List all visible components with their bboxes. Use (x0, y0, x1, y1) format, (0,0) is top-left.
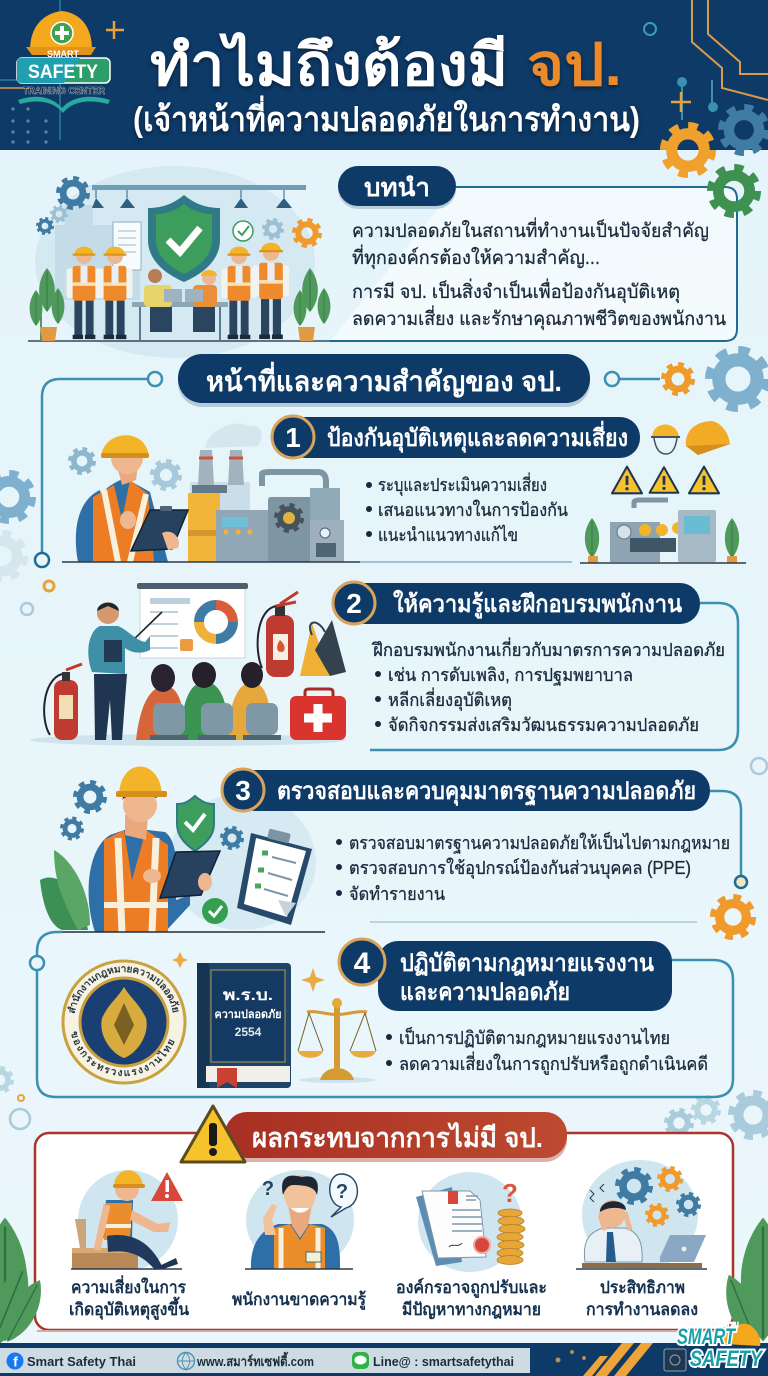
impact 4: reduced productivity (576, 1160, 707, 1270)
impact 2: lack of knowledge (245, 1170, 357, 1270)
logo: smart safety bottom right (677, 1319, 764, 1376)
impact labels: มีปัญหาทางกฎหมาย (402, 1299, 541, 1320)
item 1 bullets: เสนอแนวทางในการป้องกัน (378, 499, 568, 520)
impact heading: ผลกระทบจากการไม่มี จป. (252, 1122, 543, 1153)
header gears (664, 108, 766, 214)
impact 2: lack of knowledge: ? (336, 1181, 348, 1203)
header band (0, 0, 768, 150)
introduction text: ความปลอดภัยในสถานที่ทำงานเป็นปัจจัยสำคัญ (352, 217, 709, 242)
item 1: accident prevention (62, 416, 746, 563)
impact labels: เกิดอุบัติเหตุสูงขึ้น (69, 1296, 189, 1321)
item 4 bullets: ลดความเสี่ยงในการถูกปรับหรือถูกดำเนินคดี (399, 1051, 708, 1075)
sparkles (172, 952, 325, 992)
introduction text: ที่ทุกองค์กรต้องให้ความสำคัญ... (352, 244, 600, 270)
audience (136, 662, 281, 740)
introduction text: การมี จป. เป็นสิ่งจำเป็นเพื่อป้องกันอุบัติเหตุ (352, 278, 680, 304)
small fire extinguisher (44, 664, 82, 740)
item 4 heading: และความปลอดภัย (400, 979, 570, 1006)
impact labels: การทำงานลดลง (586, 1300, 698, 1319)
impact labels: พนักงานขาดความรู้ (232, 1290, 367, 1311)
item 1 bullets: ระบุและประเมินความเสี่ยง (378, 472, 547, 496)
item 2 text (372, 637, 725, 735)
item 4 heading (339, 939, 672, 1011)
panel: impact of not having a safety officer (35, 1106, 733, 1331)
plants (30, 268, 330, 341)
footer: line: Line@ : smartsafetythai (373, 1354, 514, 1369)
item 3 bullets (336, 831, 730, 904)
section heading: duties and importance (35, 351, 766, 567)
impact labels: ประสิทธิภาพ (600, 1278, 685, 1297)
impact heading (181, 1106, 567, 1162)
impact labels (69, 1275, 698, 1321)
item 1 heading (272, 416, 640, 458)
item 3 bullets: จัดทำรายงาน (349, 884, 445, 904)
footer: facebook: f (13, 1354, 18, 1370)
impact 3: fines and legal problems: ? (502, 1178, 518, 1208)
logo: smart safety bottom right: สถาบันฝึกอบรม (685, 1319, 739, 1329)
title: ทำไมถึงต้องมี (150, 32, 508, 98)
item 2 heading: 2 (346, 588, 362, 619)
impact labels: ความเสี่ยงในการ (71, 1275, 187, 1297)
item 2 text: จัดกิจกรรมส่งเสริมวัฒนธรรมความปลอดภัย (388, 715, 699, 735)
item 2 text: หลีกเลี่ยงอุบัติเหตุ (388, 687, 512, 711)
item 4 heading: ปฏิบัติตามกฎหมายแรงงาน (400, 950, 655, 977)
item 2 text: เช่น การดับเพลิง, การปฐมพยาบาล (388, 665, 633, 686)
icons: warning signs (612, 467, 719, 493)
item 2 heading (333, 582, 700, 624)
corner foliage (0, 1218, 768, 1355)
icon: balance scale (298, 998, 376, 1083)
illustration: inspector with tablet and checklist (40, 766, 697, 932)
section heading: duties and importance: หน้าที่และความสำคัญของ จป. (206, 361, 562, 398)
item 3 heading (222, 769, 710, 811)
title: (เจ้าหน้าที่ความปลอดภัยในการทำงาน) (133, 95, 640, 139)
footer: facebook: Smart Safety Thai (27, 1354, 136, 1369)
heading: introduction (338, 166, 456, 209)
icon: warning triangle (181, 1106, 245, 1162)
item 3 heading: 3 (235, 775, 251, 806)
book: safety act 2554: 2554 (235, 1025, 262, 1039)
seal: ของกระทรวงแรงงานไทย (71, 1031, 175, 1076)
item 4: legal compliance (28, 930, 734, 1098)
illustration: industrial machine (580, 500, 746, 563)
impact 1: higher accident risk (71, 1170, 183, 1270)
item 4 bullets: เป็นการปฏิบัติตามกฎหมายแรงงานไทย (399, 1026, 670, 1048)
item 1 bullets (366, 472, 568, 545)
item 1 bullets: แนะนำแนวทางแก้ไข (378, 524, 518, 545)
impact 3: fines and legal problems (416, 1172, 525, 1272)
book: safety act 2554: พ.ร.บ. (223, 987, 273, 1004)
item 2 heading: ให้ความรู้และฝึกอบรมพนักงาน (393, 589, 683, 619)
logo: smart safety training center: TRAINING CENTER (23, 86, 106, 97)
item 1 heading: 1 (285, 422, 301, 453)
item 4 bullets (386, 1026, 708, 1075)
introduction text: ลดความเสี่ยง และรักษาคุณภาพชีวิตของพนักงาน (352, 305, 726, 331)
footer: website (178, 1351, 314, 1370)
title: จป. (527, 33, 622, 98)
seal (62, 960, 186, 1084)
illustration: safety team with shield (28, 166, 330, 358)
first aid kit (290, 689, 346, 740)
footer: website: www.สมาร์ทเซฟตี้.com (196, 1351, 314, 1369)
logo: smart safety bottom right: ด้านความปลอดภัย (695, 1366, 755, 1376)
introduction text (352, 217, 726, 331)
book: safety act 2554: ความปลอดภัย (214, 1008, 282, 1021)
illustration: engineer with clipboard and factory (62, 424, 572, 562)
icons: helmets (651, 421, 730, 455)
logo: smart safety bottom right: SMART (677, 1324, 736, 1349)
item 1 heading: ป้องกันอุบัติเหตุและลดความเสี่ยง (327, 420, 628, 454)
item 2 text: ฝึกอบรมพนักงานเกี่ยวกับมาตรการความปลอดภัย (372, 637, 725, 660)
impact labels: องค์กรอาจถูกปรับและ (396, 1277, 547, 1299)
logo: smart safety training center (17, 11, 110, 113)
book: safety act 2554 (197, 963, 291, 1088)
illustration: training session (30, 583, 346, 746)
seal: สำนักงานกฎหมายความปลอดภัย (67, 966, 180, 1014)
item 2: training (30, 582, 738, 750)
item 3: inspection (40, 766, 753, 937)
clipboard (237, 828, 312, 925)
footer bar (0, 1343, 768, 1376)
impact 2: lack of knowledge: ? (262, 1178, 274, 1200)
item 3 bullets: ตรวจสอบการใช้อุปกรณ์ป้องกันส่วนบุคคล (PPE) (349, 857, 691, 879)
logo: smart safety training center: SMART (47, 49, 79, 59)
item 4 heading: 4 (354, 947, 371, 980)
item 3 heading: ตรวจสอบและควบคุมมาตรฐานความปลอดภัย (277, 778, 696, 807)
big fire extinguisher (258, 592, 298, 677)
logo: smart safety training center: SAFETY (28, 62, 98, 83)
background decorative gears (0, 474, 768, 1136)
heading: introduction: บทนำ (364, 174, 430, 202)
title (133, 32, 640, 139)
cone and bag (300, 620, 346, 676)
panel: introduction (330, 166, 737, 341)
